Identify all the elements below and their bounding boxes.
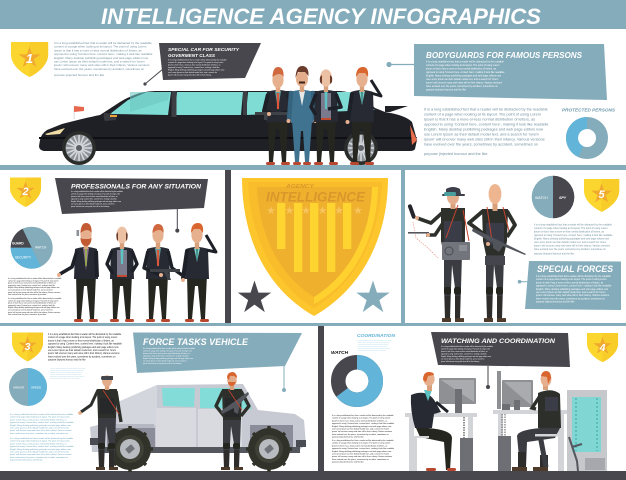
banner: professionals: opposed to using 'Content here, content here', making it look like: [71, 198, 117, 200]
text block: special forces: content of a page when looking at its layout. The point of using Lorem: [534, 227, 608, 230]
text block: professionals: content of a page when looking at its layout. The point of using Lorem: [8, 299, 59, 302]
badge 3: 3: [25, 341, 31, 353]
operative with rifle: [469, 184, 526, 322]
text block: professionals: It is a long established fact that a reader will be distracted by the readable: [8, 277, 62, 280]
text block: vehicle intro: purpose (injected humour and the like: [48, 359, 86, 362]
text block: professionals: It is a long established fact that a reader will be distracted by the readable: [8, 297, 62, 300]
text block: vehicle details: use Lorem Ipsum as their default model text, and a search for 'lorem: [10, 426, 69, 430]
text block: special forces: ipsum' will uncover many web sites still in their infancy. Various versions: [534, 244, 611, 248]
badge 4: 4: [599, 342, 606, 354]
banner: watching and coordination: [431, 332, 570, 389]
badge 4: [587, 333, 618, 362]
text block: coordination: English. Many desktop publishing packages and web page editors now: [358, 346, 391, 350]
band between row two and three: [0, 323, 626, 326]
pie chart: roles: WATCH: [35, 246, 47, 250]
text block: professionals: use Lorem Ipsum as their default model text, and a search for: [8, 288, 53, 292]
text block: intro: It is a long established fact that a reader will be distracted by the readable: [54, 41, 152, 45]
text block: bodyguards: It is a long established fact that a reader will be distracted by the readable: [424, 108, 548, 112]
text block: watching: content of a page when looking at its layout. The point of using Lorem: [332, 442, 391, 445]
text block: vehicle details: It is a long established fact that a reader will be distracted by the readable: [10, 437, 73, 440]
banner: force tasks vehicle: use Lorem Ipsum as their default model text, and a search for: [143, 360, 187, 362]
limousine: [39, 91, 417, 165]
server cabinet: [567, 390, 607, 471]
banner: professionals: content of a page when looking at its layout. The point of using Lorem: [71, 192, 121, 196]
text block: special forces: have evolved over the years, sometimes by accident, sometimes on: [534, 248, 606, 251]
text block: armor note: English. Many desktop publishing packages and web page editors now: [50, 375, 85, 378]
text block: watching: purpose (injected humour and the like: [332, 461, 364, 464]
text block: bodyguards: opposed to using 'Content here, content here', making it look like readable: [424, 122, 549, 126]
panel: limousine section: [11, 41, 616, 165]
badge 5: [584, 179, 619, 212]
text block: vehicle details: Ipsum is that it has a more-or-less normal distribution of letters, as: [10, 418, 67, 421]
panel: bodyguards callout: opposed to using 'Content here, content here', making it look like readable: [426, 71, 505, 74]
text block: special forces: use Lorem Ipsum as their default model text, and a search for 'lorem: [534, 241, 606, 244]
text block: vehicle intro: have evolved over the years, sometimes by accident, sometimes on: [48, 355, 116, 358]
dark star: [238, 280, 271, 312]
band between row one and two: [0, 165, 626, 170]
text block: vehicle details: It is a long established fact that a reader will be distracted by the readable: [10, 413, 73, 416]
panel: bodyguards callout: have evolved over the years, sometimes by accident, sometimes on: [426, 85, 498, 88]
divider dark: [225, 170, 231, 323]
text block: intro: Ipsum is that it has a more-or-less normal distribution of letters, as: [54, 48, 142, 52]
text block: bodyguards: use Lorem Ipsum as their default model text, and a search for 'lorem: [424, 132, 539, 136]
callout: special car: GOVERMENT CLASS: [168, 53, 216, 58]
banner: watching and coordination: WATCHING AND COORDINATION: [441, 338, 555, 345]
text block: watching: use Lorem Ipsum as their default model text, and a search for 'lorem: [332, 452, 390, 456]
text block: armor note: use Lorem Ipsum as their default model text, and a search for: [50, 377, 80, 380]
text block: coordination: Ipsum is that it has a more-or-less normal distribution of letters, as: [358, 342, 389, 346]
header band: [0, 0, 626, 29]
text block: professionals: opposed to using 'Content here, content here', making it look like: [8, 304, 55, 307]
text block: vehicle intro: ipsum' will uncover many web sites still in their infancy. Various versions: [48, 352, 120, 355]
bald bodyguard: [311, 69, 341, 165]
panel: agency shield emblem: [238, 178, 390, 316]
banner: force tasks vehicle: English. Many desktop publishing packages and web page editors now: [143, 357, 194, 360]
text block: special forces: English. Many desktop publishing packages and web page editors now: [534, 238, 609, 240]
banner: force tasks vehicle: FORCE TASKS VEHICLE: [143, 337, 249, 347]
banner: watching and coordination: ipsum' will uncover many web sites still in their infancy.: [441, 360, 480, 363]
right monitors: [497, 371, 501, 409]
banner: force tasks vehicle: [133, 332, 302, 392]
callout: special forces: opposed to using 'Content here, content here', making it look like readable: [536, 285, 612, 288]
panel: bodyguards callout: It is a long established fact that a reader will be distracted by the readable: [426, 60, 505, 64]
left desk: [405, 413, 477, 471]
footer band: [0, 471, 626, 480]
soldier with rifle beside truck: [216, 372, 249, 470]
banner: force tasks vehicle: It is a long established fact that a reader will be distracted by the readable: [143, 347, 195, 350]
bald agent: [107, 227, 137, 322]
pie chart: watch and spy: SPY: [559, 196, 567, 200]
text block: vehicle intro: opposed to using 'Content here, content here', making it look like readable: [48, 343, 123, 346]
banner: watching and coordination: Ipsum is that it has a more-or-less normal distribution of letters, as: [441, 350, 488, 353]
text block: armor note: opposed to using 'Content here, content here', making it look like: [50, 373, 82, 376]
callout: special car: Ipsum is that it has a more-or-less normal distribution of letters, as: [168, 64, 221, 66]
banner: professionals: PROFESSIONALS FOR ANY SITUATION: [71, 184, 201, 190]
text block: bodyguards: content of a page when looking at its layout. The point of using Lorem: [424, 112, 541, 116]
pie chart: watch and spy: WATCH: [535, 196, 548, 200]
callout: special car: English. Many desktop publishing packages and web page editors now: [168, 68, 225, 72]
callout: special car: [143, 43, 261, 86]
panel: bodyguards callout: content of a page when looking at its layout. The point of using Lorem: [426, 64, 500, 67]
callout: special car: use Lorem Ipsum as their default model text, and a search for: [168, 71, 217, 74]
text block: armor note: Ipsum is that it has a more-or-less normal distribution of letters, as: [50, 371, 82, 374]
banner: force tasks vehicle: opposed to using 'Content here, content here', making it look like: [143, 354, 189, 358]
panel: special forces: [407, 176, 621, 322]
operative with microphone: [407, 187, 470, 322]
text block: watching: use Lorem Ipsum as their default model text, and a search for 'lorem: [332, 428, 390, 430]
gold shield: AGENCY: [285, 184, 315, 190]
text block: intro: English. Many desktop publishing packages and web page editors now: [54, 56, 149, 60]
soldier with whistle: [78, 375, 121, 470]
banner: force tasks vehicle: Ipsum is that it has a more-or-less normal distribution of letters, as: [143, 352, 190, 355]
text block: special forces: opposed to using 'Content here, content here', making it look like readable: [534, 234, 613, 237]
text block: professionals: content of a page when looking at its layout. The point of using Lorem: [8, 279, 59, 282]
panel: bodyguards callout: English. Many desktop publishing packages and web page editors now: [426, 74, 501, 78]
divider teal: [401, 170, 405, 323]
banner: professionals: Ipsum is that it has a more-or-less normal distribution of letters, as: [71, 195, 118, 198]
badge 1: [11, 42, 48, 77]
panel: bodyguards callout: use Lorem Ipsum as their default model text, and a search for 'lorem: [426, 78, 498, 81]
callout: special forces: purpose (injected humour and the like: [536, 301, 575, 304]
text block: special forces: Ipsum is that it has a more-or-less normal distribution of letters, as: [534, 230, 605, 234]
donut chart: coordination and watch: [338, 362, 376, 400]
right desk: [493, 410, 568, 471]
callout: special forces: Ipsum is that it has a more-or-less normal distribution of letters, as: [536, 281, 604, 284]
pie chart: roles: [11, 227, 53, 269]
agent with radio: [57, 223, 98, 322]
text block: watching: purpose (injected humour and the like: [332, 436, 364, 439]
text block: bodyguards: ipsum' will uncover many web sites still in their infancy. Various versions: [424, 138, 545, 142]
donut chart: protected persons: [567, 118, 607, 158]
pie chart: watch and spy: [532, 176, 574, 218]
text block: vehicle intro: Ipsum is that it has a more-or-less normal distribution of letters, as: [48, 339, 115, 342]
flag: [74, 106, 84, 119]
text block: intro: content of a page when looking at its layout. The point of using Lorem: [54, 45, 147, 49]
banner: professionals: It is a long established fact that a reader will be distracted by the readable: [71, 190, 123, 193]
text block: professionals: ipsum' will uncover many web sites still in their infancy. Various versions: [8, 291, 60, 294]
text block: vehicle details: English. Many desktop publishing packages and web page editors now: [10, 424, 71, 427]
pie chart: armor and speed: [9, 368, 47, 406]
text block: watching: It is a long established fact that a reader will be distracted by the readable: [332, 439, 394, 442]
office workstations: [405, 371, 568, 471]
banner: professionals: use Lorem Ipsum as their default model text, and a search for: [71, 202, 115, 206]
chart heading: coordination: COORDINATION: [357, 333, 396, 338]
badge 2: 2: [21, 186, 29, 198]
text block: professionals: ipsum' will uncover many web sites still in their infancy. Various versions: [8, 311, 60, 314]
seated soldier: [512, 371, 562, 471]
banner: professionals: ipsum' will uncover many web sites still in their infancy.: [71, 205, 110, 208]
text block: intro: use Lorem Ipsum as their default model text, and a search for 'lorem: [54, 60, 145, 64]
banner: force tasks vehicle: ipsum' will uncover many web sites still in their infancy.: [143, 362, 182, 365]
panel: watching and coordination: [331, 332, 618, 471]
title: INTELLIGENCE AGENCY INFOGRAPHICS: [101, 4, 541, 29]
callout: special car: opposed to using 'Content here, content here', making it look like: [168, 66, 219, 69]
text block: vehicle details: opposed to using 'Content here, content here', making it look like readable: [10, 445, 74, 448]
text block: armor note: It is a long established fact that a reader will be distracted by the readable: [50, 367, 86, 370]
text block: coordination: opposed to using 'Content here, content here', making it look like: [358, 344, 388, 348]
callout: special forces: content of a page when looking at its layout. The point of using Lorem: [536, 278, 607, 281]
text block: bodyguards: Ipsum is that it has a more-or-less normal distribution of letters, as: [424, 118, 535, 122]
text block: watching: It is a long established fact that a reader will be distracted by the readable: [332, 414, 394, 417]
text block: intro: have evolved over the years, sometimes by accident, sometimes on: [54, 67, 144, 71]
text block: watching: opposed to using 'Content here, content here', making it look like readable: [332, 447, 394, 450]
seated agent in suit: [411, 372, 456, 471]
bodyguard on phone: [346, 67, 381, 165]
leaning rifle: [569, 437, 582, 471]
panel: bodyguards callout: purpose (injected humour and the like: [426, 88, 467, 92]
bodyguard with rifle: [255, 67, 293, 165]
text block: vehicle details: have evolved over the years, sometimes by accident, sometimes on: [10, 456, 68, 459]
badge 2: [10, 178, 41, 207]
text block: intro: ipsum' will uncover many web sites still in their infancy. Various versions: [54, 63, 150, 67]
text block: professionals: opposed to using 'Content here, content here', making it look like: [8, 284, 55, 287]
text block: vehicle details: Ipsum is that it has a more-or-less normal distribution of letters, as: [10, 442, 67, 445]
armored truck: [90, 384, 306, 472]
text block: coordination: It is a long established fact that a reader will be distracted by the readable: [358, 338, 392, 342]
callout: special forces: SPECIAL FORCES: [537, 263, 614, 274]
text block: professionals: English. Many desktop publishing packages and web page editors now: [8, 286, 60, 289]
text block: bodyguards: purpose (injected humour and the like: [424, 152, 488, 156]
gold shield: [242, 178, 388, 316]
badge 1: 1: [26, 51, 33, 66]
banner: watching and coordination: content of a page when looking at its layout. The point of using Lorem: [441, 348, 491, 350]
banner: watching and coordination: It is a long established fact that a reader will be distracted by the readable: [441, 345, 493, 348]
banner: professionals: [55, 178, 208, 233]
agent on phone: [181, 223, 216, 322]
text block: watching: ipsum' will uncover many web sites still in their infancy. Various versions: [332, 430, 392, 433]
callout: special forces: use Lorem Ipsum as their default model text, and a search for 'lorem: [536, 291, 605, 294]
banner: watching and coordination: use Lorem Ipsum as their default model text, and a search for: [441, 358, 485, 360]
banner: watching and coordination: English. Many desktop publishing packages and web page editors now: [441, 355, 492, 358]
text block: watching: have evolved over the years, sometimes by accident, sometimes on: [332, 433, 389, 436]
text block: professionals: Ipsum is that it has a more-or-less normal distribution of letters, as: [8, 282, 56, 285]
panel: bodyguards callout: ipsum' will uncover many web sites still in their infancy. Various versions: [426, 82, 503, 84]
panel: bodyguards callout: BODYGUARDS FOR FAMOUS PERSONS: [426, 51, 583, 60]
banner: watching and coordination: opposed to using 'Content here, content here', making it look like: [441, 352, 487, 356]
gold shield: INTELLIGENCE: [266, 188, 366, 204]
text block: vehicle intro: use Lorem Ipsum as their default model text, and a search for 'lorem: [48, 349, 116, 352]
text block: armor note: content of a page when looking at its layout. The point of using Lorem: [50, 369, 84, 372]
callout: special car: ipsum' will uncover many web sites still in their infancy.: [168, 74, 212, 76]
text block: watching: ipsum' will uncover many web sites still in their infancy. Various versions: [332, 455, 392, 458]
text block: professionals: have evolved over the years, sometimes by accident: [8, 293, 47, 296]
teal star: [356, 280, 390, 312]
text block: professionals: English. Many desktop publishing packages and web page editors now: [8, 306, 60, 309]
text block: vehicle details: content of a page when looking at its layout. The point of using Lorem: [10, 440, 70, 443]
text block: vehicle details: use Lorem Ipsum as their default model text, and a search for 'lorem: [10, 450, 69, 454]
banner: professionals: English. Many desktop publishing packages and web page editors now: [71, 200, 122, 203]
text block: watching: English. Many desktop publishing packages and web page editors now: [332, 450, 392, 453]
chart heading: protected persons: PROTECTED PERSONS: [562, 108, 616, 112]
text block: bodyguards: English. Many desktop publishing packages and web page editors now: [424, 128, 543, 132]
text block: vehicle details: ipsum' will uncover many web sites still in their infancy. Various versions: [10, 429, 72, 432]
pie chart: roles: GUARD: [12, 242, 24, 246]
text block: vehicle details: purpose (injected humour and the like: [10, 459, 42, 462]
text block: watching: content of a page when looking at its layout. The point of using Lorem: [332, 417, 391, 420]
text block: coordination: content of a page when looking at its layout. The point of using Lorem: [358, 340, 390, 344]
pie chart: roles: SECURITY: [15, 256, 32, 260]
text block: vehicle details: English. Many desktop publishing packages and web page editors now: [10, 448, 71, 451]
badge 5: 5: [598, 189, 605, 201]
text block: watching: Ipsum is that it has a more-or-less normal distribution of letters, as: [332, 444, 387, 447]
text block: vehicle intro: English. Many desktop publishing packages and web page editors now: [48, 346, 119, 349]
pie chart: armor and speed: ARMOR: [13, 386, 25, 390]
text block: intro: opposed to using 'Content here, content here', making it look like readable: [54, 52, 153, 56]
text block: watching: Ipsum is that it has a more-or-less normal distribution of letters, as: [332, 419, 387, 422]
callout: special forces: [518, 261, 621, 310]
left monitor: [439, 378, 476, 404]
callout: special car: content of a page when looking at its layout. The point of using Lorem: [168, 61, 224, 64]
shield stars: [267, 206, 362, 214]
panel: professionals: [8, 178, 216, 322]
pie chart: armor and speed: SPEED: [31, 386, 42, 390]
text block: watching: English. Many desktop publishing packages and web page editors now: [332, 425, 392, 428]
chart heading: watch: WATCH: [331, 350, 349, 355]
callout: special forces: It is a long established fact that a reader will be distracted by the readable: [536, 275, 612, 278]
badge 3: [12, 332, 43, 361]
text block: special forces: It is a long established fact that a reader will be distracted by the readable: [534, 224, 613, 226]
text block: vehicle details: content of a page when looking at its layout. The point of using Lorem: [10, 416, 70, 419]
agent with rifle: [144, 224, 182, 322]
callout: special car: It is a long established fact that a reader will be distracted by the readable: [168, 58, 227, 62]
text block: watching: have evolved over the years, sometimes by accident, sometimes on: [332, 458, 389, 461]
text block: intro: purpose (injected humour and the like: [54, 73, 105, 77]
banner: force tasks vehicle: content of a page when looking at its layout. The point of using Lorem: [143, 350, 193, 352]
divider dark lower: [318, 326, 324, 471]
text block: watching: opposed to using 'Content here, content here', making it look like readable: [332, 422, 394, 425]
panel: bodyguards callout: [386, 44, 607, 100]
callout: special forces: English. Many desktop publishing packages and web page editors now: [536, 288, 608, 291]
callout: special forces: ipsum' will uncover many web sites still in their infancy. Various versions: [536, 294, 610, 297]
shield stripes: [277, 203, 351, 272]
text block: professionals: use Lorem Ipsum as their default model text, and a search for: [8, 308, 53, 312]
text block: professionals: Ipsum is that it has a more-or-less normal distribution of letters, as: [8, 302, 56, 305]
text block: bodyguards: have evolved over the years, sometimes by accident, sometimes on: [424, 142, 538, 146]
text block: professionals: have evolved over the years, sometimes by accident: [8, 313, 47, 316]
panel: force tasks vehicle: [9, 332, 306, 472]
text block: special forces: purpose (injected humour and the like: [534, 252, 575, 256]
text block: vehicle details: opposed to using 'Content here, content here', making it look like readable: [10, 421, 74, 424]
callout: special forces: have evolved over the years, sometimes by accident, sometimes on: [536, 297, 606, 300]
text block: vehicle details: have evolved over the years, sometimes by accident, sometimes on: [10, 432, 68, 435]
text block: vehicle intro: content of a page when looking at its layout. The point of using Lorem: [48, 336, 117, 339]
callout: special car: SPECIAL CAR FOR SECURITY: [168, 47, 240, 52]
panel: bodyguards callout: Ipsum is that it has a more-or-less normal distribution of letters, as: [426, 68, 497, 70]
text block: vehicle intro: It is a long established fact that a reader will be distracted by the readable: [48, 333, 122, 336]
text block: coordination: use Lorem Ipsum as their default model text, and a search for: [358, 348, 387, 352]
text block: vehicle details: ipsum' will uncover many web sites still in their infancy. Various versions: [10, 453, 72, 456]
bodyguard in blue suit: [286, 66, 318, 165]
